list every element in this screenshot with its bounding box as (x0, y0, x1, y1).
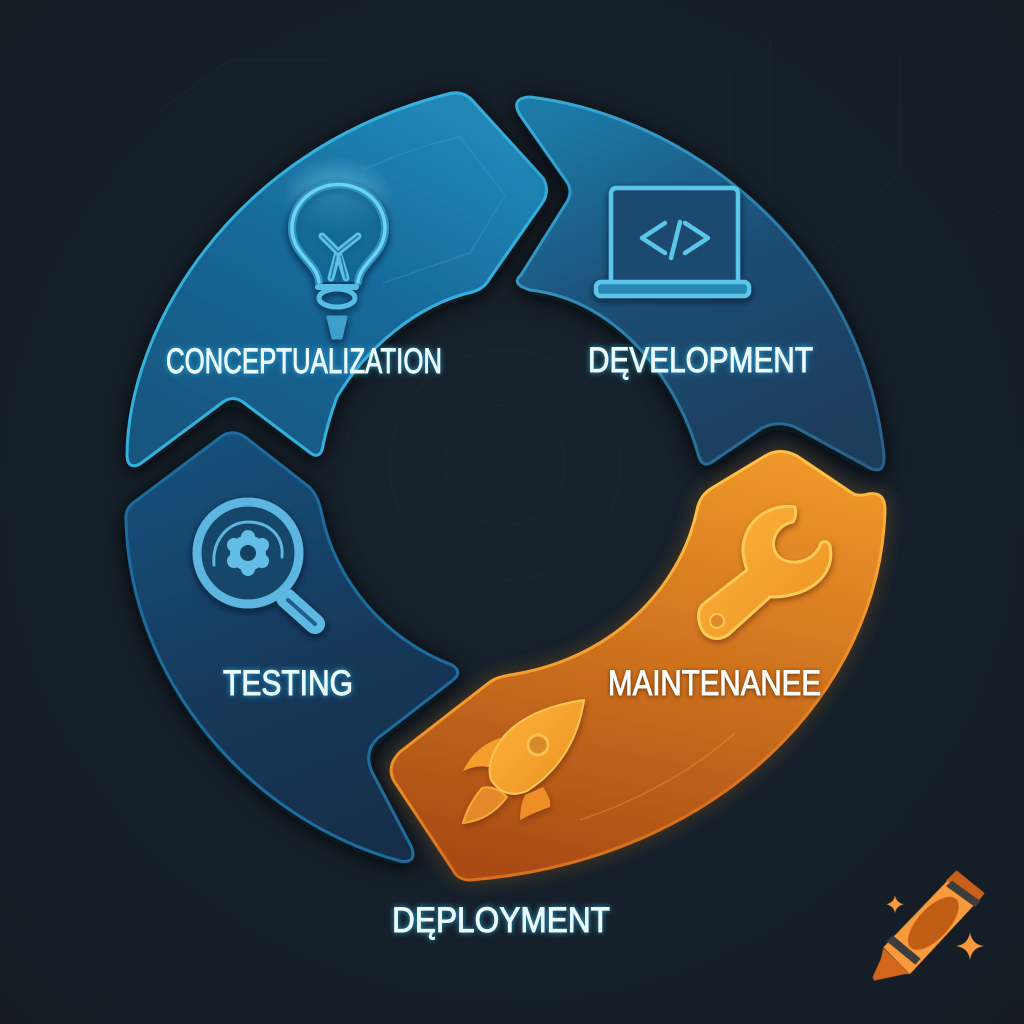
icon: crayon with sparkles (873, 872, 984, 981)
panel: deployment and maintenance (391, 452, 885, 880)
label: testing: TESTING (223, 664, 353, 703)
icon: magnifier with gear (197, 502, 315, 624)
icon detail: gear (227, 530, 269, 576)
label: conceptualization: CONCEPTUALIZATION (166, 342, 442, 381)
label: deployment: DĘPLOYMENT (392, 901, 610, 940)
panel: development (517, 97, 884, 470)
icon: laptop with code (596, 188, 749, 296)
label: development: DĘVELOPMENT (588, 341, 813, 380)
label: maintenance: MAINTENANEE (608, 664, 821, 703)
icon: light bulb (292, 185, 385, 338)
panel: testing (126, 433, 458, 861)
icon: rocket (463, 700, 584, 823)
panel: conceptualization (127, 93, 546, 466)
icon: wrench (698, 507, 831, 639)
